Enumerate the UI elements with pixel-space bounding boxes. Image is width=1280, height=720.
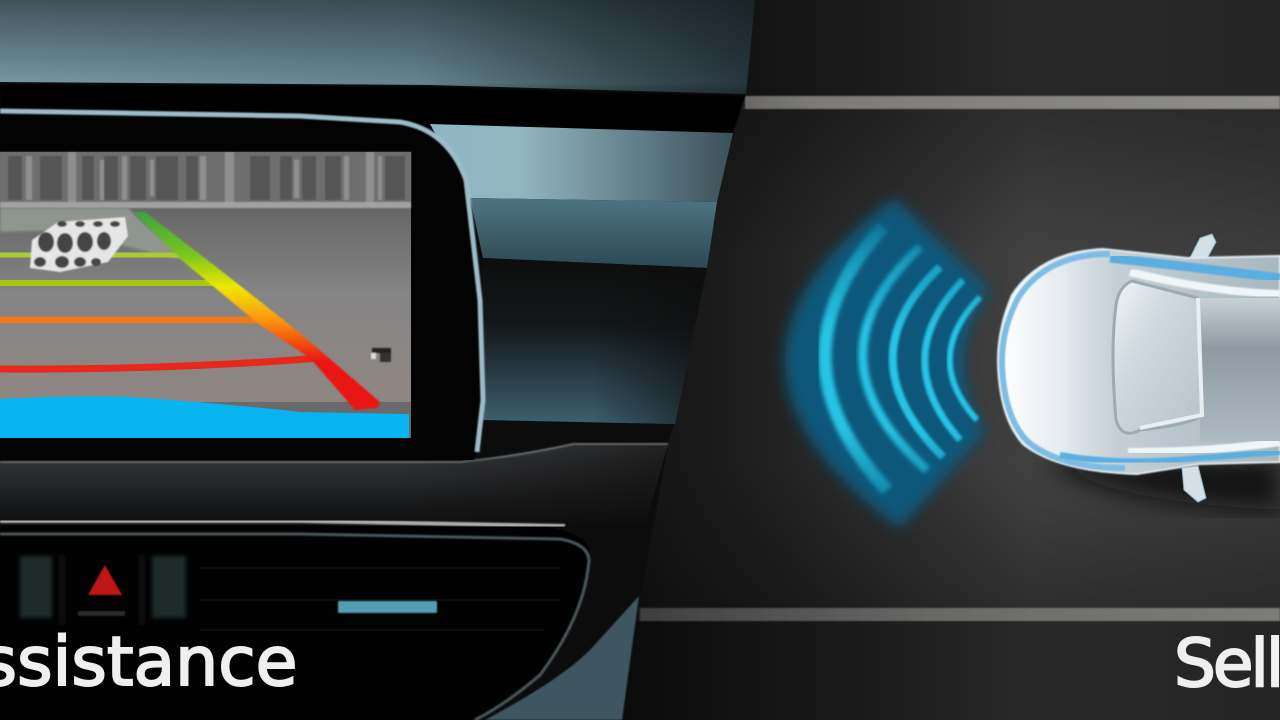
small marker (371, 348, 391, 362)
road lane line top (745, 96, 1280, 109)
mirror bottom (1182, 466, 1206, 502)
guide diagonal (133, 212, 380, 410)
icon: sensor waves (785, 198, 990, 528)
indicator light (338, 601, 437, 613)
upper dash surface (0, 0, 755, 94)
console trim lines (0, 521, 589, 720)
car shadow (1010, 430, 1280, 510)
vent slats (200, 568, 560, 630)
caption: self: Sell (1174, 625, 1280, 702)
blue rim (1002, 254, 1125, 468)
roof (1200, 298, 1280, 442)
dark trim strip (0, 84, 745, 133)
mirror top (1190, 234, 1216, 264)
camera image (0, 152, 411, 438)
icon: car top view (998, 234, 1280, 510)
right light panel (430, 124, 733, 268)
door rail top (1130, 272, 1280, 294)
side buttons (20, 555, 186, 625)
windshield (1113, 281, 1202, 433)
door rail bottom (1128, 442, 1280, 452)
dashboard screen (0, 111, 483, 460)
blue bumper (0, 396, 409, 438)
icon: hazard triangle (78, 565, 125, 616)
fence (0, 152, 411, 208)
vent recess panel (483, 258, 707, 424)
ground light edge (0, 208, 190, 262)
lower dash strip (0, 444, 668, 525)
car body (998, 249, 1280, 474)
lower console (0, 521, 639, 720)
panel: car dashboard (0, 0, 755, 720)
parking guide lines (0, 255, 320, 369)
obstacle pattern (30, 217, 128, 272)
road lane line bottom (640, 608, 1280, 621)
teal console corner (485, 596, 639, 720)
